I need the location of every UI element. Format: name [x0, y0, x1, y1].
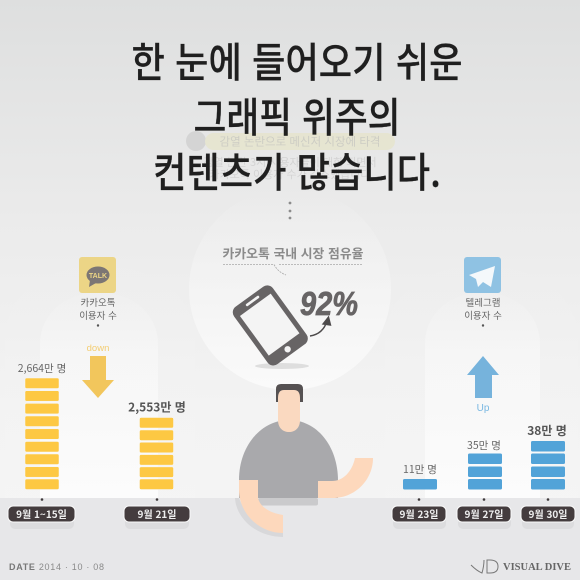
pill shadows [10, 514, 574, 529]
date pills [8, 498, 575, 529]
pill: Sep 23: 9월 23일 [400, 506, 438, 521]
label: kakao users: 카카오톡 [81, 295, 116, 309]
pill: Sep 21: 9월 21일 [138, 506, 176, 521]
pill: Sep 27 [457, 506, 511, 522]
logo: visual dive [471, 560, 571, 573]
bars: 2,664 [25, 378, 59, 490]
torso [239, 420, 338, 498]
logo: visual dive: VISUAL DIVE [503, 562, 571, 573]
arm shadow [235, 498, 283, 537]
icon: kakao talk [79, 257, 116, 293]
bars: 38 [531, 441, 565, 490]
pill: Sep 27: 9월 27일 [465, 506, 503, 521]
label: telegram users: 텔레그램 [466, 295, 500, 309]
label: telegram users [464, 295, 502, 322]
faded background content behind title: 감열 논란 3시 사용자들이 대화 되면서 [203, 154, 377, 170]
faded background content behind title: 카카오톡 이용자 수가 감소했습니다 [209, 166, 371, 182]
pill: Sep 30: 9월 30일 [529, 506, 567, 521]
hair [276, 384, 303, 402]
title: 컨텐츠가 많습니다. [153, 139, 441, 199]
pill: Sep 23 [392, 506, 446, 522]
icon: telegram [464, 257, 501, 293]
pill: Sep 30 [521, 506, 575, 522]
panel: telegram [403, 257, 567, 490]
right arm [318, 458, 373, 498]
speech underline [223, 264, 363, 275]
label: 2,553: 2,553만 명 [128, 398, 186, 416]
icon: smartphone [230, 283, 311, 368]
panel: market share [222, 243, 364, 369]
arrow: down [82, 356, 114, 398]
phone shadow [255, 363, 309, 369]
face [278, 390, 300, 432]
faded background content behind title [186, 131, 395, 182]
arrow: rising [310, 317, 330, 336]
label: 38: 38만 명 [527, 422, 567, 439]
marker dots [41, 498, 549, 501]
label: kakao users: 이용자 수 [79, 308, 117, 322]
label: down: down [87, 343, 109, 354]
bars: 35 [468, 454, 502, 490]
label: telegram users: 이용자 수 [464, 308, 502, 322]
heading: market share: 카카오톡 국내 시장 점유율 [222, 243, 364, 262]
icon: kakao talk: TALK [89, 273, 107, 280]
illustration: person [235, 384, 373, 537]
bars: 2,553 [140, 418, 174, 490]
pill: Sep 21 [124, 506, 190, 522]
title: 그래픽 위주의 [194, 84, 400, 144]
arrow: up [467, 356, 499, 398]
panel: kakao [18, 257, 186, 490]
label: 35: 35만 명 [467, 438, 501, 453]
faded background content behind title: 감열 논란으로 메신저 시장에 타격 [220, 134, 380, 150]
label: 2,664: 2,664만 명 [18, 361, 66, 376]
title: 한 눈에 들어오기 쉬운 [132, 29, 462, 89]
title [132, 29, 462, 199]
connector dots [289, 202, 291, 219]
left arm [239, 480, 283, 533]
bar: 11 [403, 479, 437, 490]
label: 11: 11만 명 [403, 462, 437, 477]
stat: 92%: 92% [300, 285, 358, 322]
date: DATE 2014 · 10 · 08 [9, 562, 105, 572]
floor [0, 498, 580, 580]
label: up: Up [477, 403, 490, 414]
pill: Sep 1-15: 9월 1~15일 [16, 506, 67, 521]
label: kakao users [79, 295, 117, 322]
